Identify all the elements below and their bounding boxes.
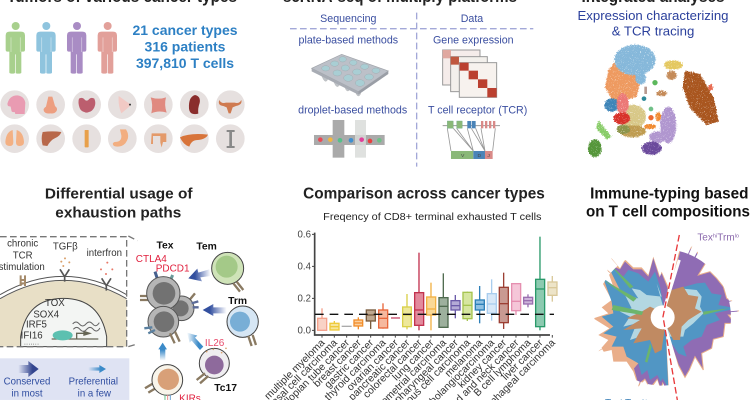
panel: tumors of various cancer types — [0, 0, 245, 153]
icon: TCR gene segments: J — [487, 153, 490, 159]
row labels: Gene expression — [433, 35, 514, 47]
row labels: droplet-based methods — [298, 105, 407, 117]
panel: integrated analyses — [578, 0, 728, 157]
icons: four patients — [6, 22, 117, 74]
text: dataset summary: 316 patients — [145, 38, 226, 54]
diagram: cell nucleus and membrane: SOX4 — [33, 309, 60, 320]
diagram: cell nucleus and membrane: TGFβ — [53, 241, 78, 252]
chart: UMAP clusters — [588, 45, 719, 157]
icon: droplet microfluidics — [314, 120, 385, 158]
column headers — [320, 13, 483, 25]
text: dataset summary: 21 cancer types — [132, 22, 238, 38]
labels: T cell types and markers: Tem — [196, 241, 217, 252]
icon: well plate — [312, 54, 388, 96]
diagram: cell nucleus and membrane: TOX — [45, 298, 65, 309]
title: immune typing — [586, 185, 750, 221]
labels: T cell types and markers: CTLA4 — [136, 254, 167, 265]
text: dataset summary: 397,810 T cells — [136, 55, 234, 71]
chart: box plot: liver cancer — [500, 337, 546, 383]
title: immune typing: Immune-typing based — [590, 185, 748, 202]
dashed callout box — [0, 236, 137, 347]
panel: differential usage of exhaustion paths — [0, 185, 258, 400]
text: dataset summary — [132, 22, 238, 71]
icon: TCR gene segments: V — [461, 153, 465, 159]
subtitle: expression and TCR tracing: & TCR tracing — [612, 24, 694, 38]
icon: TCR gene segments: D — [478, 153, 482, 159]
diagram: cell nucleus and membrane — [0, 239, 127, 347]
diagram: T cell subsets — [140, 252, 258, 400]
diagram: cell nucleus and membrane: IFI16 — [21, 330, 43, 341]
icons: organs — [0, 90, 245, 153]
chart subtitle: Freqency of CD8+ terminal exhausted T cells — [323, 212, 541, 223]
diagram: cell nucleus and membrane: IRF5 — [26, 319, 47, 330]
subtitle: expression and TCR tracing — [578, 8, 728, 38]
chart: box plot: colorectal cancer — [361, 337, 425, 400]
icon: TCR gene segments — [443, 121, 500, 159]
diagram: cell nucleus and membrane: chronic — [7, 239, 38, 250]
dashed dividers — [290, 13, 533, 167]
legend: arrow meaning: in most — [11, 388, 43, 399]
title: comparison: Comparison across cancer types — [303, 185, 545, 202]
title: differential usage: exhaustion paths — [55, 204, 181, 221]
chart: box plot: 0.2 — [298, 294, 311, 305]
panel: scRNA-seq of multiple platforms — [283, 0, 533, 167]
legend: arrow meaning: Conserved — [4, 377, 50, 388]
legend: arrow meaning: Preferential — [69, 377, 118, 388]
panel: immune-typing based on T cell compositions — [583, 185, 750, 400]
chart: box plot: lung cancer — [391, 337, 437, 383]
label: Tex-hi Trm-lo: lo — [735, 234, 739, 240]
chart: circular stacked bars — [583, 235, 743, 400]
chart: box plot: gastric cancer — [323, 337, 377, 391]
chart: box plot: B cell lymphoma — [472, 337, 534, 399]
title: differential usage — [45, 185, 194, 221]
labels: T cell types and markers: Trm — [228, 296, 247, 307]
labels: T cell types and markers: PDCD1 — [156, 264, 190, 275]
chart: box plot: breast cancer — [312, 337, 364, 390]
chart: box plot: 0.6 — [298, 230, 311, 241]
labels: T cell types and markers: IL26 — [205, 338, 225, 349]
chart: box plot: 0.0 — [298, 326, 311, 337]
panel: comparison across cancer types — [263, 185, 558, 400]
chart: box plot: 0.4 — [298, 262, 312, 273]
arrows: differentiation paths — [158, 269, 227, 361]
legend: arrow meaning — [0, 358, 129, 400]
chart: box plot — [263, 230, 558, 400]
chart: box plot: melanoma — [443, 337, 485, 380]
label: Tex-hi Trm-lo: Tex — [697, 233, 713, 244]
labels: T cell types and markers — [136, 241, 247, 400]
icon: expression matrices — [443, 50, 497, 97]
subtitle: expression and TCR tracing: Expression characterizing — [578, 8, 728, 23]
label: Tex-hi Trm-lo: hi — [713, 234, 717, 240]
row labels: T cell receptor (TCR) — [428, 105, 527, 117]
chart: box plot: ovarian cancer — [345, 337, 401, 393]
diagram: cell nucleus and membrane: interfron — [87, 248, 122, 259]
chart: box plot: kidney cancer — [456, 337, 509, 391]
column headers: Data — [461, 13, 483, 25]
title: differential usage: Differential usage of — [45, 185, 194, 202]
diagram: cell nucleus and membrane: TCR — [13, 250, 33, 261]
labels: T cell types and markers: Tex — [156, 241, 174, 252]
legend: arrow meaning: in a few — [78, 388, 111, 399]
row labels: plate-based methods — [299, 35, 398, 47]
row labels — [298, 35, 527, 117]
labels: T cell types and markers: Tc17 — [214, 383, 237, 394]
title: immune typing: on T cell compositions — [586, 204, 750, 221]
column headers: Sequencing — [320, 13, 377, 25]
diagram: cell nucleus and membrane: ....... — [24, 340, 39, 347]
label: Tex-hi Trm-lo: Trm — [717, 233, 735, 244]
